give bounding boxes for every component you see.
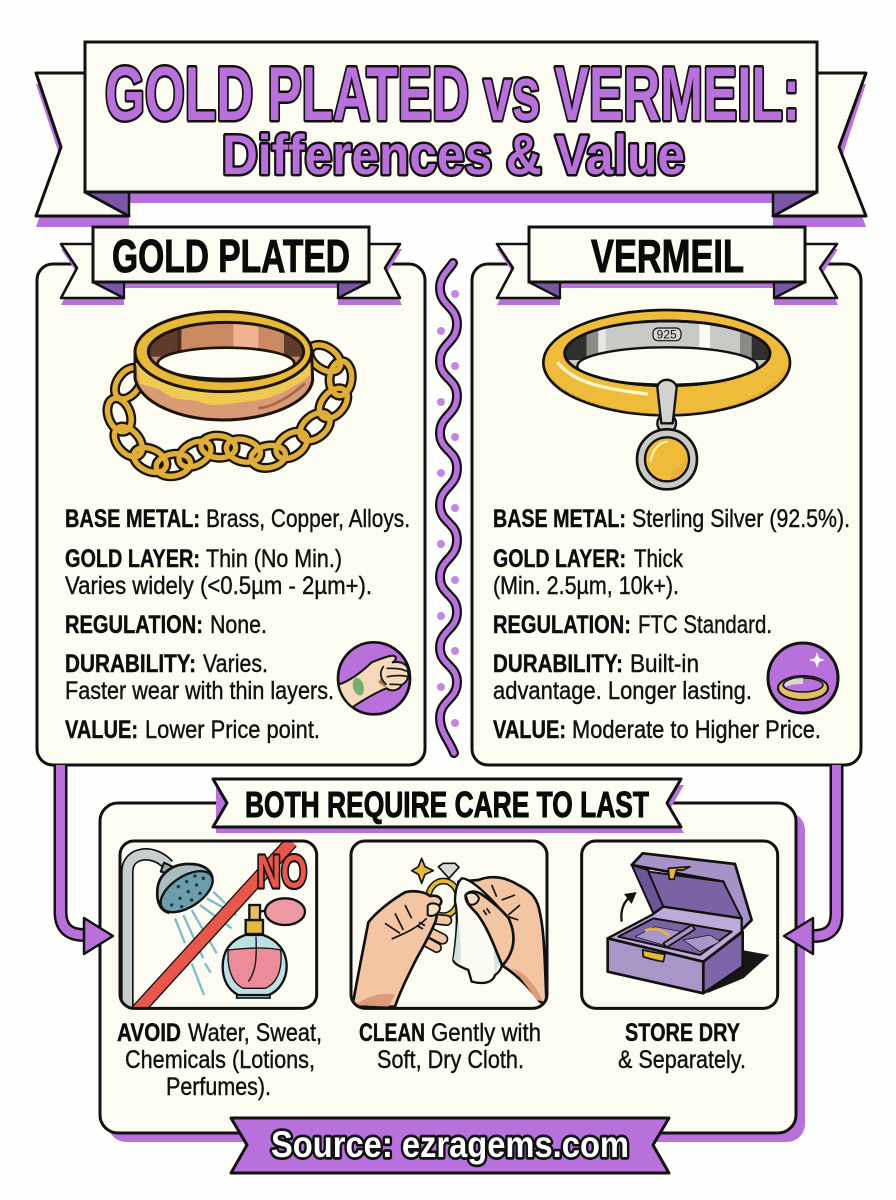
panel: vermeil (472, 264, 861, 765)
ribbon: care heading: BOTH REQUIRE CARE TO LAST (245, 784, 649, 825)
caption: clean (359, 1019, 541, 1074)
text block: gold plated facts: Lower Price point. (145, 716, 320, 744)
ribbon: gold plated heading: GOLD PLATED (112, 230, 350, 282)
card: clean with cloth (351, 841, 547, 1008)
text block: vermeil facts: BASE METAL: (493, 505, 626, 533)
text block: gold plated facts: BASE METAL: (65, 505, 200, 533)
icon: shining vermeil ring (768, 643, 838, 713)
caption: clean: Gently with (431, 1019, 541, 1047)
card: avoid water and chemicals: NO (257, 845, 307, 897)
text block: vermeil facts: Moderate to Higher Price. (572, 716, 821, 744)
card: store dry in box (582, 841, 778, 1008)
caption: avoid: Perfumes). (166, 1073, 271, 1101)
icon: jewelry box (608, 853, 769, 993)
text block: vermeil facts: REGULATION: (493, 611, 631, 639)
illustration: vermeil ring with pendant: 925 (657, 328, 677, 342)
icon: wrist with green stain (335, 642, 410, 714)
ribbon: gold plated heading (61, 227, 402, 305)
caption: avoid: AVOID (117, 1019, 181, 1047)
text block: vermeil facts: FTC Standard. (638, 611, 772, 639)
slash: prohibition line (135, 842, 292, 1013)
ribbon: care heading (213, 779, 684, 833)
text block: gold plated facts: Varies widely (<0.5µm - 2µm+). (65, 572, 372, 600)
text block: vermeil facts: Sterling Silver (92.5%). (632, 505, 850, 533)
text block: gold plated facts: VALUE: (65, 716, 138, 744)
panel: care (100, 803, 805, 1142)
text block: gold plated facts: Varies. (203, 650, 268, 678)
caption: avoid (117, 1019, 322, 1101)
icon: right hand back (458, 877, 547, 1005)
text block: vermeil facts: VALUE: (493, 716, 566, 744)
caption: avoid: Chemicals (Lotions, (125, 1046, 315, 1074)
text block: gold plated facts: REGULATION: (65, 611, 203, 639)
icon: perfume bottle (223, 898, 305, 998)
icon: right thumb (466, 885, 543, 1002)
panel: gold plated (37, 264, 425, 765)
arrow: lid opening (621, 892, 637, 922)
text block: vermeil facts: Built-in (630, 650, 699, 678)
ribbon: source: Source: ezragems.com (271, 1124, 629, 1165)
text block: gold plated facts: DURABILITY: (65, 650, 196, 678)
icon: shower (127, 854, 237, 1008)
ribbon: vermeil heading: VERMEIL (591, 230, 744, 282)
arrow: vermeil to care (784, 765, 836, 954)
illustration: gold plated ring and chain (103, 312, 353, 479)
text block: vermeil facts: DURABILITY: (493, 650, 623, 678)
text block: gold plated facts: None. (210, 611, 267, 639)
text block: vermeil facts: (Min. 2.5µm, 10k+). (493, 572, 679, 600)
text block: gold plated facts: Thin (No Min.) (206, 545, 342, 573)
caption: clean: CLEAN (359, 1019, 425, 1047)
arrow: gold plated to care (60, 765, 113, 954)
caption: store dry (618, 1019, 746, 1074)
icon: sparkle and diamond ring (412, 858, 459, 916)
subtitle text: Differences & Value (222, 123, 685, 186)
icon: cloth (453, 878, 508, 983)
illustration: vermeil ring with pendant (543, 310, 790, 489)
icon: left hand (352, 891, 447, 1007)
text block: gold plated facts: Faster wear with thin layers. (65, 677, 334, 705)
text block: vermeil facts: GOLD LAYER: (493, 545, 626, 573)
text block: gold plated facts: Brass, Copper, Alloys. (206, 505, 410, 533)
text block: gold plated facts (65, 505, 410, 744)
text block: vermeil facts: advantage. Longer lasting. (493, 677, 752, 705)
text block: vermeil facts: Thick (634, 545, 683, 573)
ribbon: source (231, 1118, 669, 1173)
text block: vermeil facts (493, 505, 850, 744)
ribbon: vermeil heading (497, 227, 838, 305)
caption: clean: Soft, Dry Cloth. (377, 1046, 524, 1074)
title ribbon (36, 42, 866, 227)
caption: store dry: & Separately. (618, 1046, 746, 1074)
caption: avoid: Water, Sweat, (188, 1019, 322, 1047)
text block: gold plated facts: GOLD LAYER: (65, 545, 200, 573)
caption: store dry: STORE DRY (625, 1019, 740, 1047)
wavy divider (437, 263, 459, 753)
card: avoid water and chemicals (120, 841, 317, 1013)
